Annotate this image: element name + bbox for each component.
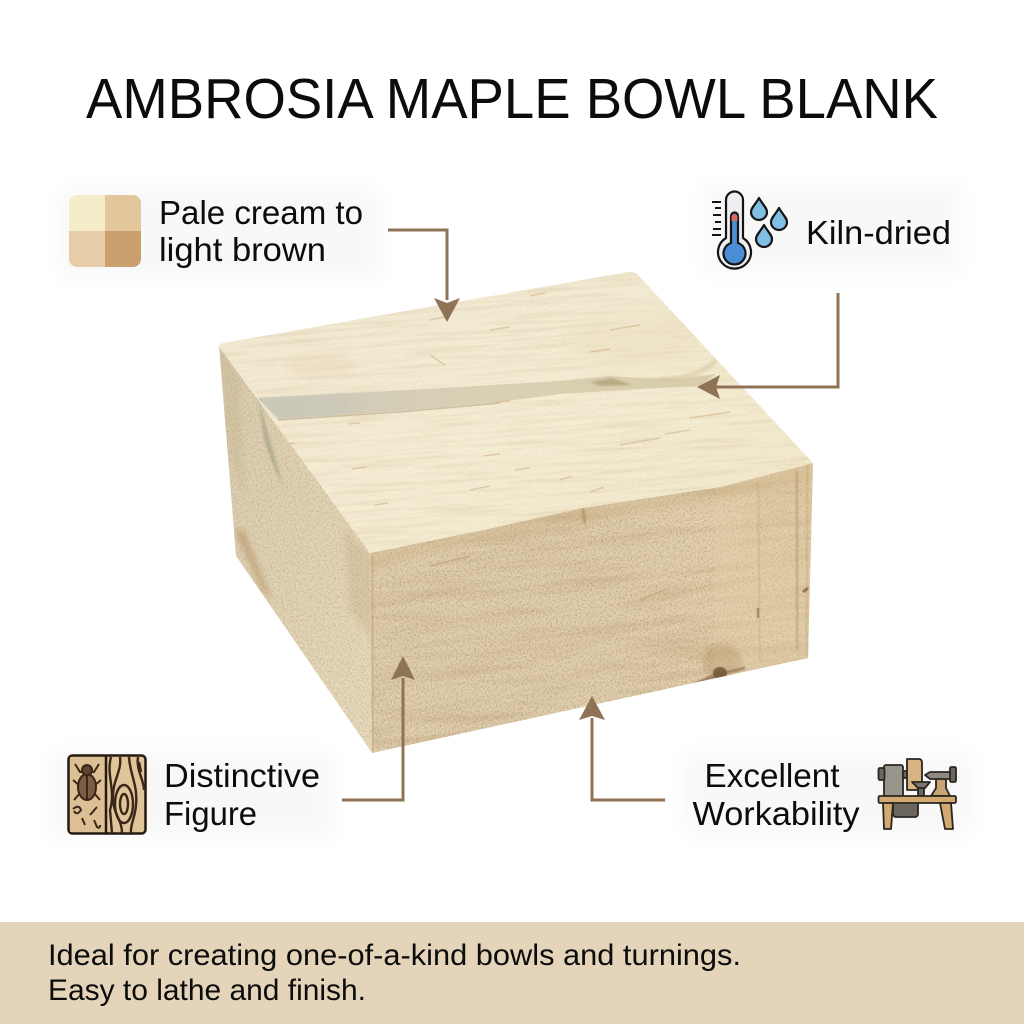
label text xyxy=(692,757,860,832)
block: front face xyxy=(370,463,813,753)
footer text: Ideal for creating one-of-a-kind bowls and turnings. xyxy=(48,939,741,972)
beetle xyxy=(73,764,101,828)
label text xyxy=(164,757,320,832)
footer text: Easy to lathe and finish. xyxy=(48,974,366,1007)
label backdrop: soft grey patches xyxy=(52,186,970,836)
arrow xyxy=(388,230,460,322)
callout: kiln-dried xyxy=(697,192,951,399)
footer band xyxy=(0,922,1024,1024)
title: AMBROSIA MAPLE BOWL BLANK xyxy=(86,67,938,131)
callout: distinctive figure xyxy=(68,656,415,834)
wood: grey mineral streak xyxy=(258,374,716,419)
wood block photo xyxy=(179,217,857,805)
icon: lathe on bench xyxy=(878,759,956,829)
icon: beetle and wood grain xyxy=(68,756,146,834)
label text: Kiln-dried xyxy=(806,214,951,251)
label text xyxy=(159,194,363,268)
label text: Distinctive xyxy=(164,757,320,794)
block: left face xyxy=(219,345,372,753)
icon: thermometer and drops xyxy=(712,192,787,269)
wood: small flecks xyxy=(289,292,730,506)
arrow xyxy=(579,696,665,800)
callout: pale cream to light brown xyxy=(69,194,460,322)
label text: Figure xyxy=(164,795,257,832)
icon: colour swatch xyxy=(69,195,141,267)
callout: excellent workability xyxy=(579,696,956,832)
block: top face xyxy=(219,272,813,553)
label text: Excellent xyxy=(704,757,840,794)
arrow xyxy=(342,656,415,800)
label text: light brown xyxy=(159,231,326,268)
footer text xyxy=(48,939,741,1007)
arrow xyxy=(697,293,838,399)
label text: Workability xyxy=(692,795,860,832)
label text: Pale cream to xyxy=(159,194,363,231)
